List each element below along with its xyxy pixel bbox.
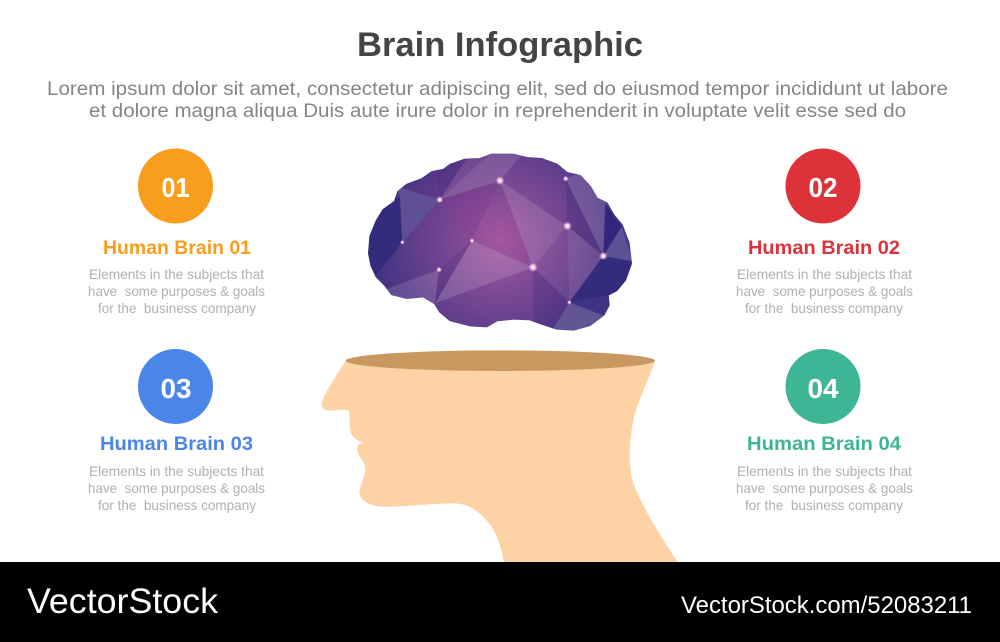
panel: item 01: Human Brain 01 [103, 238, 251, 259]
panel: item 04 [736, 349, 913, 513]
watermark bar: VectorStock.com/52083211 [681, 592, 972, 619]
panel: item 03: have some purposes & goals [88, 480, 265, 496]
panel: item 02: Human Brain 02 [748, 238, 900, 259]
panel: item 02: for the business company [745, 300, 903, 316]
panel: item 04: for the business company [745, 497, 903, 513]
panel: item 02: have some purposes & goals [736, 283, 913, 299]
panel: item 03: 03 [160, 373, 192, 404]
panel: item 04: Elements in the subjects that [737, 463, 912, 479]
panel: item 04: have some purposes & goals [736, 480, 913, 496]
panel: item 02: Elements in the subjects that [737, 266, 912, 282]
intro paragraph: Lorem ipsum dolor sit amet, consectetur adipiscing elit, sed do eiusmod tempor incididunt ut labore [47, 79, 948, 100]
panel: item 03: for the business company [98, 497, 256, 513]
intro paragraph [47, 79, 948, 122]
panel: item 01: Elements in the subjects that [89, 266, 264, 282]
icon: head silhouette [322, 350, 678, 563]
panel: item 02: 02 [808, 172, 838, 203]
panel: item 03 [88, 349, 265, 513]
panel: item 03: Human Brain 03 [100, 434, 253, 455]
intro paragraph: et dolore magna aliqua Duis aute irure dolor in reprehenderit in voluptate velit esse sed do [89, 101, 906, 122]
watermark bar [0, 562, 1000, 642]
icon: low-poly brain [368, 154, 632, 331]
panel: item 01 [88, 148, 265, 316]
panel: item 01: 01 [162, 172, 190, 203]
watermark bar: VectorStock [27, 582, 219, 621]
panel: item 04: 04 [808, 373, 839, 404]
panel: item 03: Elements in the subjects that [89, 463, 264, 479]
panel: item 02 [736, 148, 913, 316]
title: Brain Infographic [357, 26, 643, 64]
panel: item 01: for the business company [98, 300, 256, 316]
panel: item 04: Human Brain 04 [747, 434, 901, 455]
panel: item 01: have some purposes & goals [88, 283, 265, 299]
